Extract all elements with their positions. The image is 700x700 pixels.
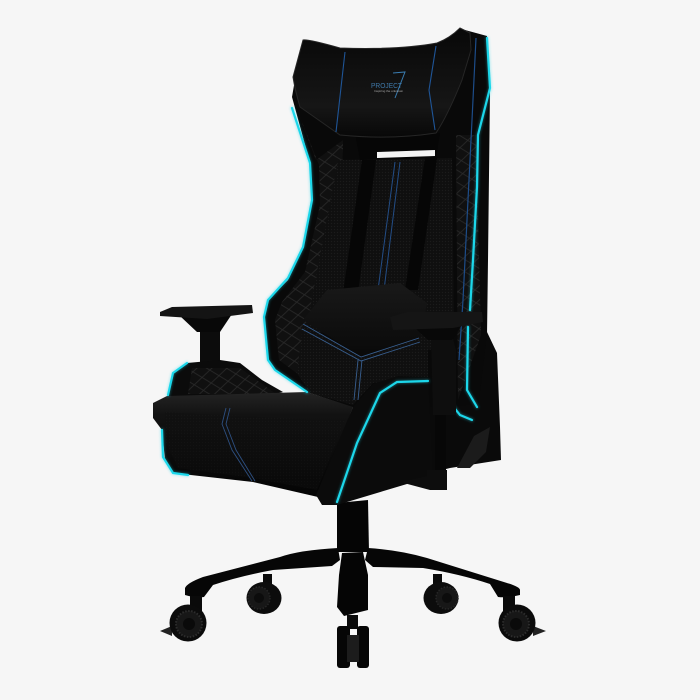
- logo: [371, 72, 405, 98]
- back straps: [342, 158, 437, 300]
- chair base: [160, 500, 546, 668]
- LED glow: [162, 38, 490, 502]
- front left caster: [160, 596, 206, 642]
- lumbar stitching: [302, 324, 420, 400]
- front centre caster: [337, 615, 369, 668]
- headrest strap bracket: [355, 133, 440, 160]
- rear left caster: [246, 574, 282, 614]
- LED core lines: [162, 38, 490, 502]
- seat stitching: [222, 408, 255, 481]
- centre stitching: [378, 162, 400, 290]
- seat mesh front: [165, 412, 345, 490]
- logo: PROJECT: [371, 81, 402, 90]
- chassis and back plate: [424, 332, 501, 472]
- centre back mesh panel: [306, 158, 454, 350]
- left bolster: [168, 360, 283, 400]
- headrest stitching: [336, 46, 436, 132]
- left armrest: [160, 305, 253, 362]
- lumbar pillow: [297, 283, 428, 405]
- right quilted panel: [456, 135, 481, 400]
- recline bracket: [457, 427, 490, 468]
- front base leg: [337, 552, 368, 616]
- cyan LED strips: [162, 38, 490, 502]
- logo: Inspiring the unknown: [374, 89, 404, 93]
- gas lift column: [337, 500, 369, 552]
- right body stitching: [459, 38, 476, 360]
- seat side panel: [316, 376, 433, 505]
- backrest shell: [264, 30, 490, 410]
- headrest: [293, 28, 471, 137]
- front right caster: [498, 596, 546, 642]
- white strip gap: [377, 150, 435, 158]
- bolster quilting: [188, 368, 276, 394]
- rear right caster: [424, 574, 458, 614]
- left base leg: [185, 548, 340, 597]
- right base leg: [365, 548, 520, 597]
- left wing quilted panel: [275, 112, 343, 380]
- right armrest: [390, 312, 483, 490]
- seat cushion: [153, 392, 353, 497]
